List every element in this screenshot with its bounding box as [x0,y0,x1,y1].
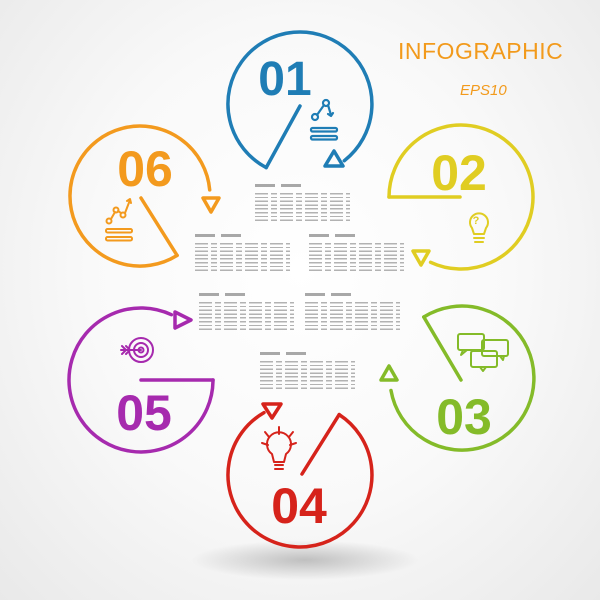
step 04 red: 04 [271,478,327,534]
text block: left lower [199,293,294,330]
step 04 red [228,404,372,547]
icon: nodes chart [311,100,337,140]
text block: right lower [305,293,400,330]
floor shadow [190,540,420,580]
text block: bottom [260,352,355,389]
step 02 yellow [389,125,533,269]
icon: light bulb [262,427,296,469]
icon: growth chart [106,199,132,240]
step 03 green: 03 [436,389,492,445]
icon: chat bubbles [458,334,508,371]
step 05 purple: 05 [116,385,172,441]
step 06 orange: 06 [117,141,173,197]
step 01 blue [228,32,372,168]
text block: left upper [195,234,290,271]
icon: target [121,338,153,362]
text block: top [255,184,350,221]
step 02 yellow: 02 [431,145,487,201]
subtitle EPS10: EPS10 [460,82,507,99]
text block: right upper [309,234,404,271]
step 06 orange [70,126,219,266]
step 05 purple [69,308,213,452]
step 02 yellow: ? [473,215,480,227]
icon: question bulb [470,213,488,242]
title: INFOGRAPHIC [398,38,563,64]
step 03 green [381,306,534,450]
step 01 blue: 01 [258,53,312,106]
